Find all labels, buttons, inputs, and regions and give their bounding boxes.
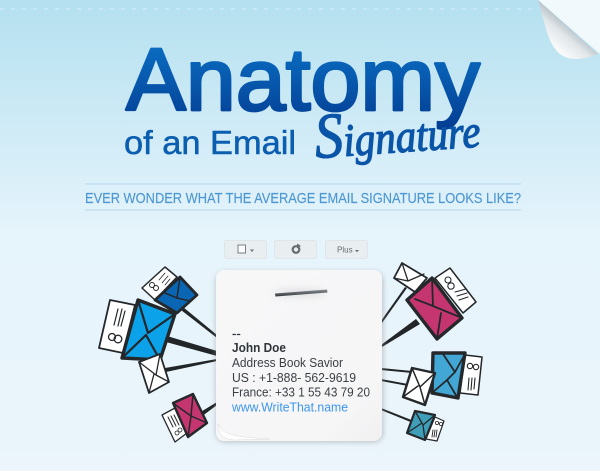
contact card mid right [460,355,482,395]
white envelope top right [394,263,427,292]
white envelope [139,354,169,393]
large contact card [99,300,135,353]
signature text: www.WriteThat.name [231,400,348,414]
curled card corner [218,424,270,440]
small contact card [162,408,187,442]
signature note card [216,270,383,442]
script word: Signature: Signature [312,91,482,173]
contact card top right [435,268,476,313]
contact card top left [142,267,177,300]
large blue envelope [122,300,175,360]
small contact card right [426,417,444,441]
left connector lines [165,307,217,417]
button: refresh [274,240,316,258]
subtitle: of an Email: of an Email [124,124,296,161]
paper clip [274,290,328,296]
page curl corner [538,0,600,59]
white envelope mid right [403,368,435,405]
dark blue envelope [155,277,197,313]
pink envelope [407,278,462,339]
signature text: US : +1-888- 562-9619 [232,371,356,385]
pink envelope bottom left [173,394,207,437]
button: Plus: Plus [337,246,353,254]
signature text: Address Book Savior [232,356,343,370]
group: right envelopes [394,263,482,441]
button: Plus [326,240,368,258]
small teal envelope [407,411,435,440]
right connector lines [381,287,420,423]
title: Anatomy: Anatomy [126,30,480,129]
group: left envelopes [99,267,207,442]
button: checkbox [224,240,266,258]
toolbar buttons [224,240,368,258]
stitched top edge [0,8,536,10]
tagline with rules: EVER WONDER WHAT THE AVERAGE EMAIL SIGNATURE LOOKS LIKE? [85,190,521,207]
signature text: France: +33 1 55 43 79 20 [232,386,370,400]
signature text: -- [232,326,241,341]
signature text: John Doe [232,340,286,355]
signature text [231,326,370,414]
teal envelope [432,353,465,398]
